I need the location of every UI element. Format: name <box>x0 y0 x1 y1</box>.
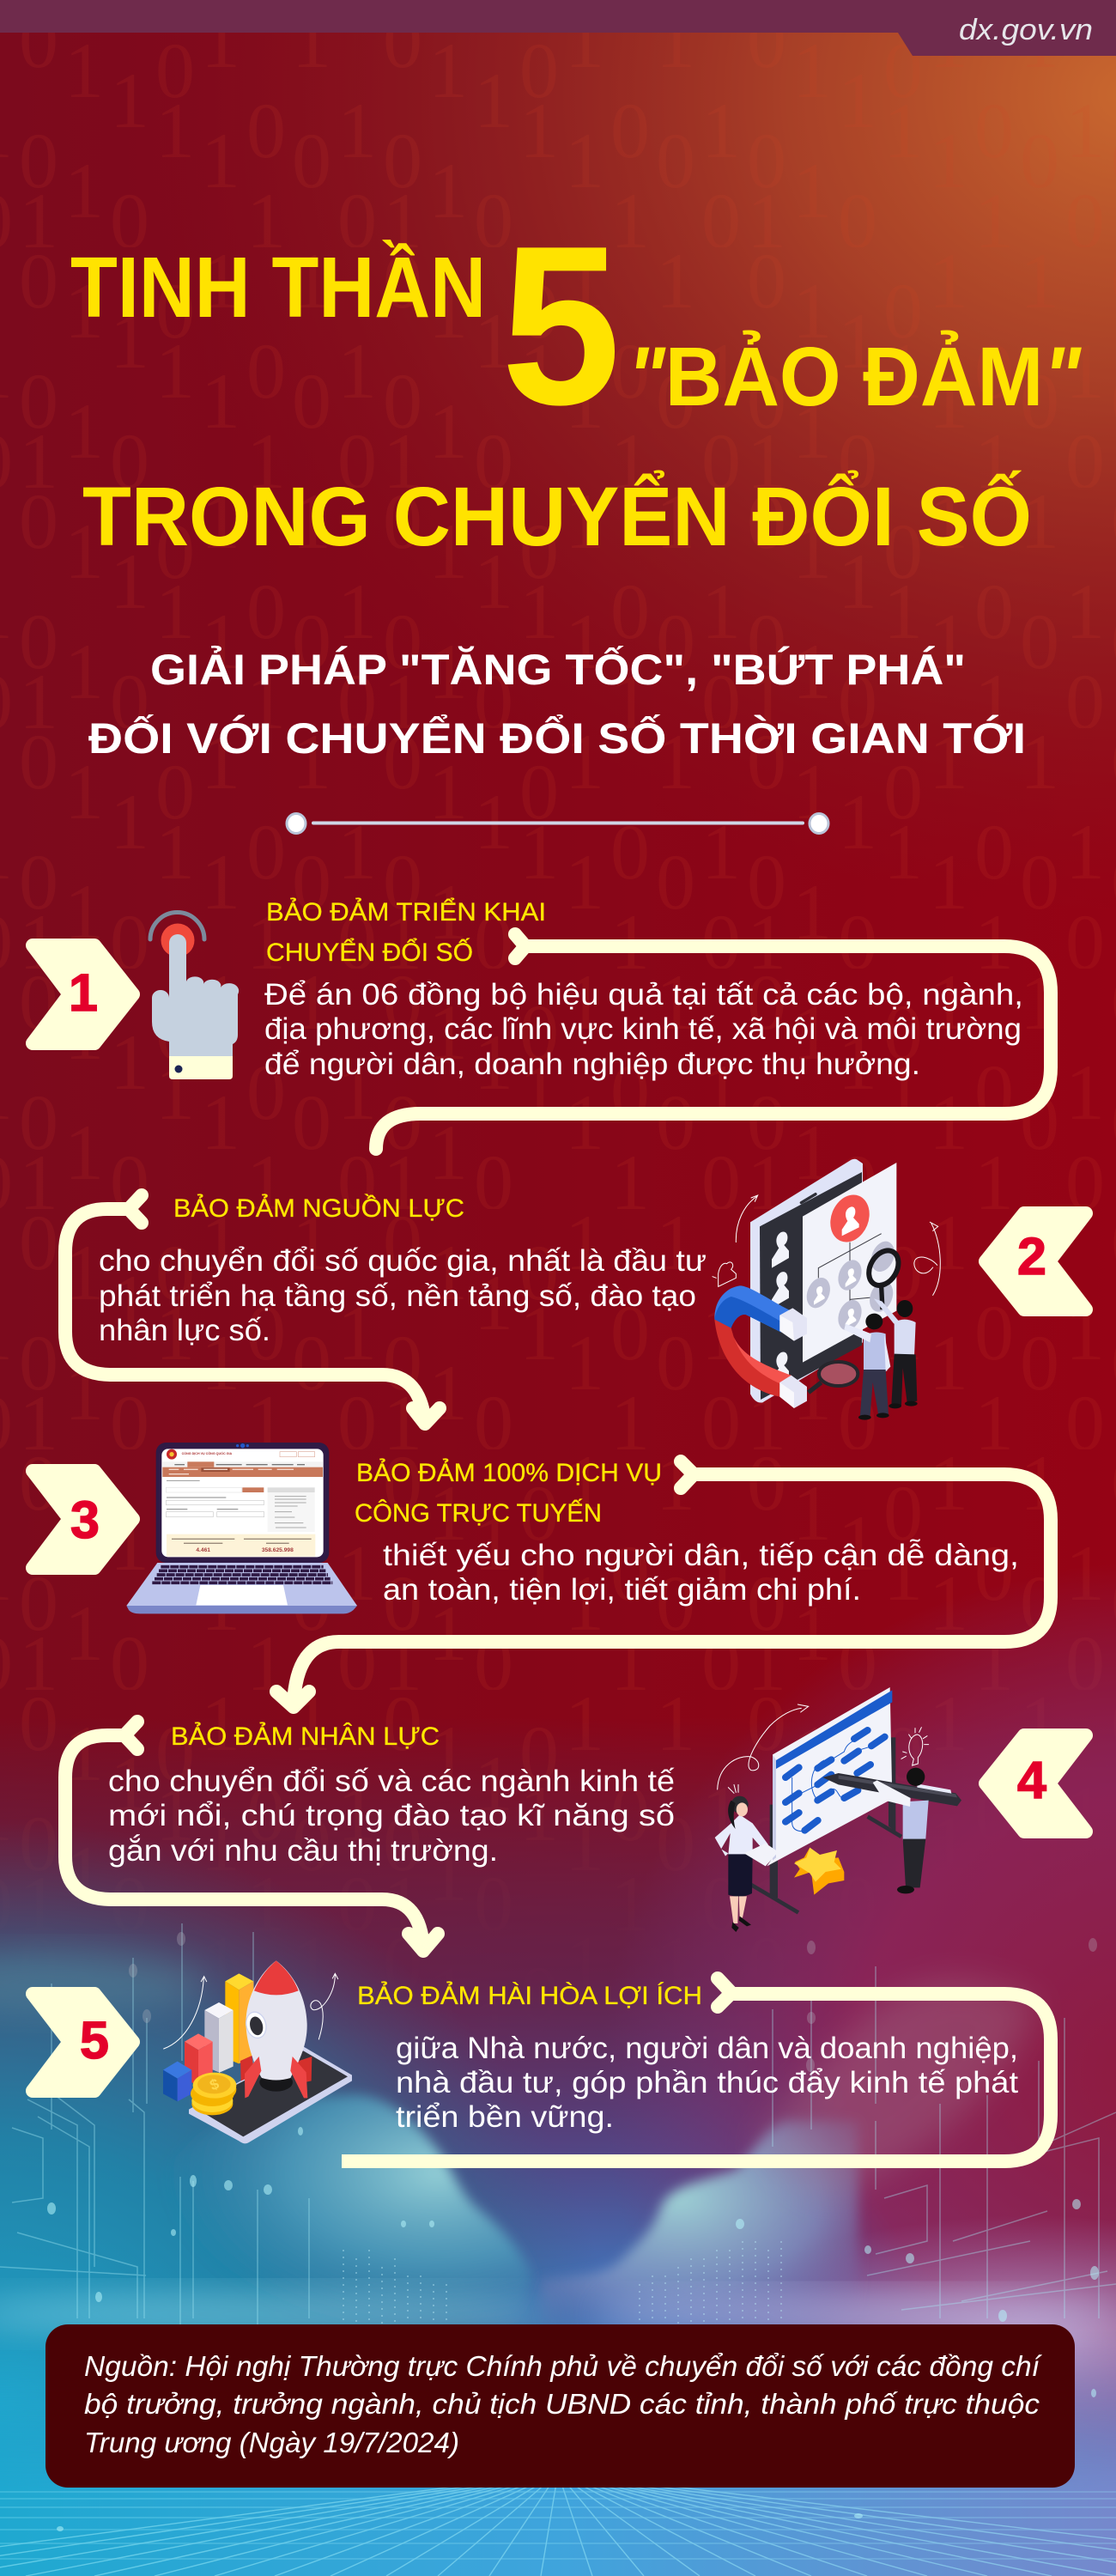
body 2 <box>99 1244 707 1347</box>
subtitle <box>88 645 1026 762</box>
item 5 <box>33 1960 1051 2168</box>
badge 5 <box>33 1994 133 2091</box>
glowing particles <box>47 2127 1099 2531</box>
source text: Trung ương (Ngày 19/7/2024) <box>84 2427 459 2458</box>
heading 1: CHUYỂN ĐỔI SỐ <box>266 938 473 967</box>
body 5: triển bền vững. <box>396 2100 614 2134</box>
body 3 <box>383 1539 1019 1607</box>
people <box>844 1300 918 1420</box>
connector 1 <box>376 934 1051 1149</box>
title <box>70 198 1082 563</box>
dotted data columns near the horizon <box>343 2241 781 2324</box>
badge 2: 2 <box>1017 1227 1046 1285</box>
connector 2 <box>65 1195 440 1424</box>
illustration: rocket launching from a tablet with bar chart and coins: $ <box>207 2075 221 2093</box>
badge 1 <box>33 945 133 1043</box>
top bar with source tab <box>0 0 1116 56</box>
site name: dx.gov.vn <box>959 14 1093 46</box>
subtitle: GIẢI PHÁP "TĂNG TỐC", "BỨT PHÁ" <box>150 645 966 694</box>
title: "BẢO ĐẢM" <box>628 330 1082 423</box>
body 4 <box>108 1765 675 1868</box>
illustration: laptop showing the public service portal <box>126 1443 357 1613</box>
body 2: phát triển hạ tầng số, nền tảng số, đào tạo <box>99 1279 696 1313</box>
title: TINH THẦN <box>70 240 486 336</box>
body 4: mới nổi, chú trọng đào tạo kĩ năng số <box>108 1799 675 1832</box>
circuit lines <box>0 1923 1116 2327</box>
source text: Nguồn: Hội nghị Thường trực Chính phủ về chuyển đổi số với các đồng chí <box>84 2350 1042 2382</box>
body 1 <box>264 978 1023 1081</box>
badge 5: 5 <box>80 2011 109 2069</box>
body 2: nhân lực số. <box>99 1314 270 1347</box>
white arrows and small outline person <box>713 1195 940 1295</box>
heading 3: CÔNG TRỰC TUYẾN <box>355 1498 602 1528</box>
body 1: Để án 06 đồng bộ hiệu quả tại tất cả các bộ, ngành, <box>264 978 1023 1012</box>
badge 2 <box>986 1213 1086 1309</box>
body 5: nhà đầu tư, góp phần thúc đẩy kinh tế phát <box>396 2066 1018 2099</box>
illustration: laptop showing the public service portal: 4.461 <box>196 1547 210 1553</box>
badge 4: 4 <box>1017 1751 1046 1809</box>
heading 4: BẢO ĐẢM NHÂN LỰC <box>171 1722 440 1751</box>
stars <box>794 1848 844 1895</box>
item 3 <box>33 1443 1051 1707</box>
divider <box>287 814 828 833</box>
lower magnifier <box>809 1362 858 1393</box>
illustration: rocket launching from a tablet with bar chart and coins <box>163 1960 352 2143</box>
body 2: cho chuyển đổi số quốc gia, nhất là đầu tư <box>99 1244 707 1278</box>
body 1: địa phương, các lĩnh vực kinh tế, xã hội và môi trường <box>264 1012 1022 1046</box>
badge 4 <box>986 1735 1086 1832</box>
heading 1: BẢO ĐẢM TRIỂN KHAI <box>266 897 546 927</box>
source panel <box>45 2324 1075 2488</box>
body 3: thiết yếu cho người dân, tiếp cận dễ dàng, <box>383 1539 1019 1572</box>
badge 3 <box>33 1471 133 1568</box>
body 4: gắn với nhu cầu thị trường. <box>108 1834 498 1868</box>
body 1: để người dân, doanh nghiệp được thụ hưởng. <box>264 1048 920 1081</box>
pen <box>822 1773 961 1806</box>
item 1 <box>33 897 1051 1149</box>
illustration: laptop showing the public service portal: CỔNG DỊCH VỤ CÔNG QUỐC GIA <box>182 1451 233 1455</box>
title: 5 <box>501 198 621 452</box>
body 3: an toàn, tiện lợi, tiết giảm chi phí. <box>383 1573 861 1607</box>
badge 1: 1 <box>69 963 98 1022</box>
body 4: cho chuyển đổi số và các ngành kinh tế <box>108 1765 675 1798</box>
illustration: laptop showing the public service portal: 358.625.998 <box>262 1547 294 1553</box>
heading 3 <box>355 1458 662 1528</box>
subtitle: ĐỐI VỚI CHUYỂN ĐỔI SỐ THỜI GIAN TỚI <box>88 714 1026 762</box>
body 5: giữa Nhà nước, người dân và doanh nghiệp, <box>396 2032 1018 2065</box>
badge 3: 3 <box>70 1491 100 1549</box>
magnet <box>714 1285 807 1408</box>
body 5 <box>396 2032 1018 2134</box>
item 2 <box>65 1159 1086 1424</box>
connector 5 <box>352 1978 1051 2161</box>
connector 3 <box>276 1461 1051 1707</box>
connector 4 <box>65 1722 438 1951</box>
man <box>873 1768 929 1893</box>
illustration: magnet attracting people on a phone org chart <box>713 1159 940 1420</box>
illustration: two people drawing a flowchart on a whiteboard <box>715 1687 961 1932</box>
heading 3: BẢO ĐẢM 100% DỊCH VỤ <box>356 1458 662 1487</box>
woman <box>715 1796 779 1932</box>
heading 2: BẢO ĐẢM NGUỒN LỰC <box>173 1194 464 1223</box>
source text <box>84 2350 1042 2458</box>
heading 1 <box>266 897 546 967</box>
title: TRONG CHUYỂN ĐỔI SỐ <box>82 470 1032 563</box>
item 4 <box>65 1687 1086 1951</box>
lightbulb and arrows <box>718 1704 929 1793</box>
perspective floor with dense light lines <box>0 2351 1116 2576</box>
source text: bộ trưởng, trưởng ngành, chủ tịch UBND các tỉnh, thành phố trực thuộc <box>84 2388 1040 2420</box>
icon: tapping hand <box>150 912 239 1079</box>
heading 5: BẢO ĐẢM HÀI HÒA LỢI ÍCH <box>357 1981 702 2010</box>
